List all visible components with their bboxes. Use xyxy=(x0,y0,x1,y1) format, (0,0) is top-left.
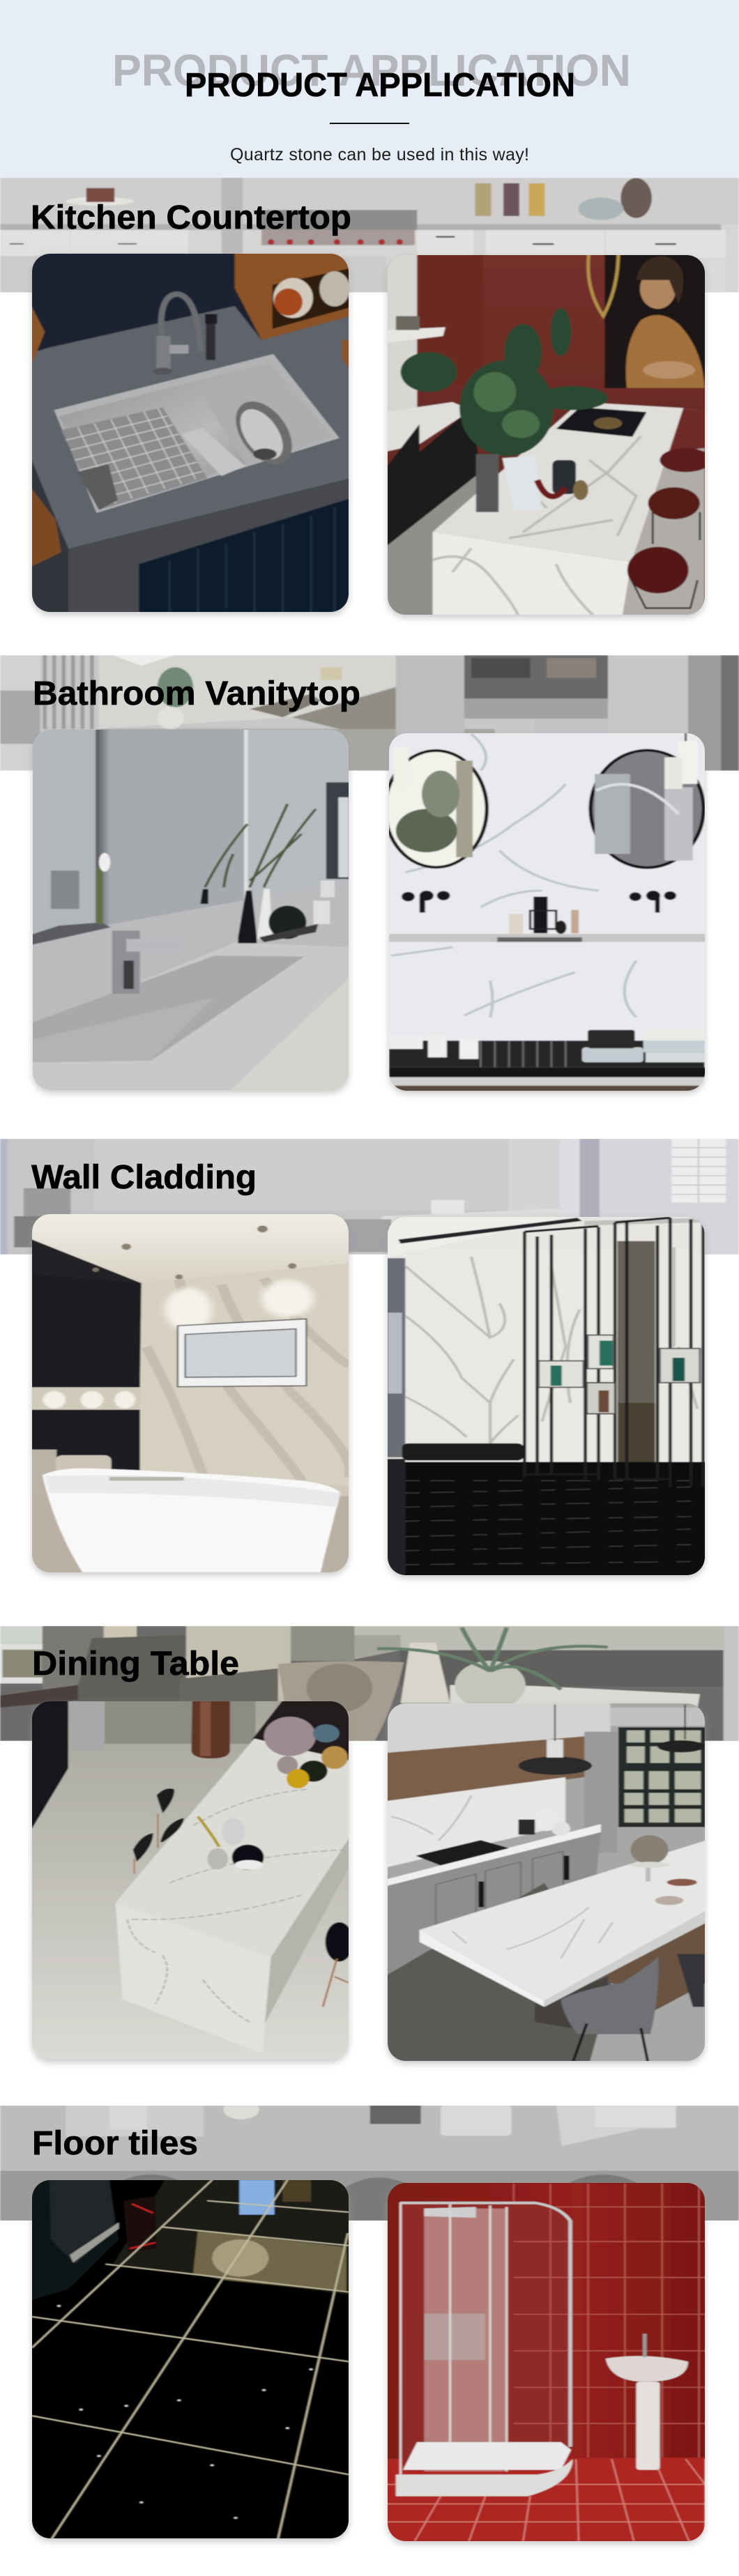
photo: white marble island in gray kitchen xyxy=(384,1701,709,2064)
subtitle: Quartz stone can be used in this way! xyxy=(230,145,529,164)
photo: white marble wall with round mirrors xyxy=(384,730,709,1094)
panel: wall cladding xyxy=(0,1139,739,1578)
background band: white wall xyxy=(0,1139,739,1255)
panel: kitchen countertop xyxy=(0,178,739,618)
title: PRODUCT APPLICATION xyxy=(185,67,575,104)
panel: floor tiles xyxy=(0,2099,739,2544)
heading: Floor tiles: Floor tiles xyxy=(32,2125,198,2162)
heading: Kitchen Countertop: Kitchen Countertop xyxy=(31,199,351,236)
photo: black sparkle floor tiles xyxy=(29,2177,353,2541)
header panel xyxy=(0,0,739,178)
photo: red sparkle tiles and shower xyxy=(384,2181,709,2544)
heading: Wall Cladding: Wall Cladding xyxy=(31,1159,257,1196)
ghost title: PRODUCT APPLICATION xyxy=(112,45,631,95)
background band: modern kitchen xyxy=(0,655,739,771)
background band: dining room xyxy=(0,1626,739,1741)
panel: bathroom vanitytop xyxy=(0,655,739,1094)
photo: marble island in oxblood kitchen xyxy=(384,252,712,618)
background band: kitchen xyxy=(0,178,739,293)
photo: gray quartz vanity with trough sink xyxy=(29,727,353,1094)
heading: Bathroom Vanitytop: Bathroom Vanitytop xyxy=(33,675,360,712)
photo: waterfall island from above xyxy=(29,1699,353,2063)
heading: Dining Table: Dining Table xyxy=(32,1646,239,1682)
panel: dining table xyxy=(0,1626,739,2064)
photo: marble wall with black frames and black floor xyxy=(384,1215,709,1578)
photo: gray countertop with steel sink xyxy=(29,252,353,616)
background band: concrete desk xyxy=(0,2099,739,2221)
photo: bathtub with marble wall xyxy=(29,1211,353,1577)
